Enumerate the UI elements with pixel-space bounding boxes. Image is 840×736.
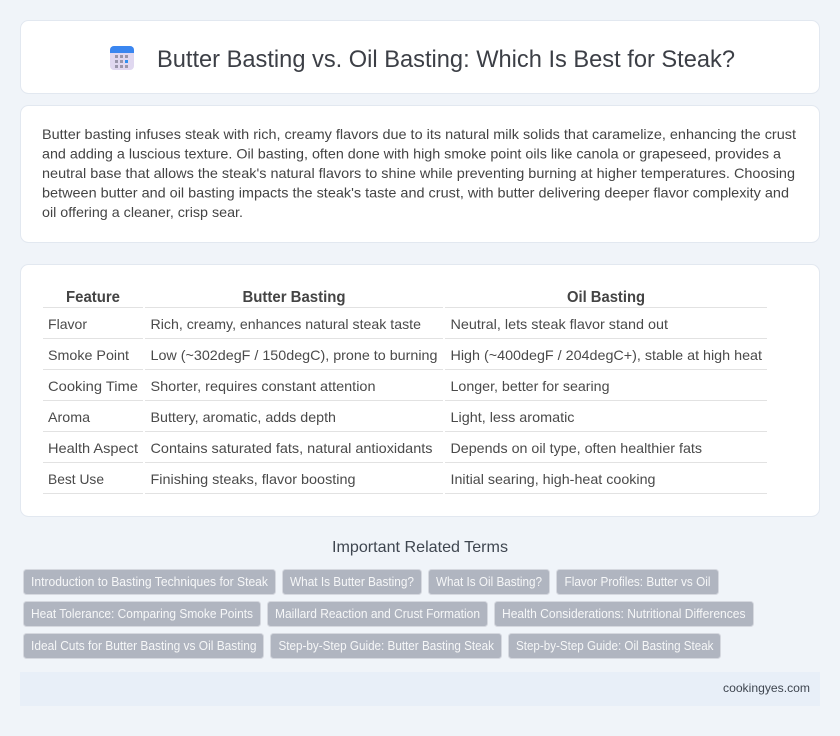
panel: header xyxy=(20,20,820,94)
text block: introduction: and adding a luscious texture. Oil basting, often done with high smoke point oils like canola or grapeseed, provides a xyxy=(42,146,781,162)
table row: smoke point xyxy=(43,347,767,370)
panel: introduction xyxy=(20,106,820,242)
tag: heat tolerance: Heat Tolerance: Comparing Smoke Points xyxy=(31,606,253,621)
tag: introduction: Introduction to Basting Techniques for Steak xyxy=(31,574,268,589)
footer: cookingyes.com xyxy=(723,681,810,695)
tag: flavor profiles: Flavor Profiles: Butter vs Oil xyxy=(564,574,711,589)
table row: smoke point: Low (~302degF / 150degC), prone to burning xyxy=(150,347,438,363)
table header row: Oil Basting xyxy=(567,289,645,306)
text block: introduction: Butter basting infuses steak with rich, creamy flavors due to its natural milk solids that caramelize, enhancing the crust xyxy=(42,126,796,142)
heading: important related terms: Important Related Terms xyxy=(332,539,508,556)
table row: flavor: Flavor xyxy=(48,316,87,332)
tag: ideal cuts: Ideal Cuts for Butter Basting vs Oil Basting xyxy=(31,638,256,653)
table row: best use xyxy=(43,471,767,494)
tag: introduction xyxy=(24,570,276,594)
table header row: Feature xyxy=(66,289,120,306)
table row: cooking time: Longer, better for searing xyxy=(450,378,610,394)
table row: aroma xyxy=(43,409,767,432)
related term tags xyxy=(24,570,754,658)
tag: maillard reaction xyxy=(268,602,488,626)
tag: butter guide: Step-by-Step Guide: Butter Basting Steak xyxy=(278,638,494,653)
tag: ideal cuts xyxy=(24,634,264,658)
tag: what is oil basting xyxy=(428,570,550,594)
tag: oil guide xyxy=(508,634,720,658)
table row: health aspect: Depends on oil type, often healthier fats xyxy=(450,440,702,456)
table row: smoke point: Smoke Point xyxy=(48,347,129,363)
table row: smoke point: High (~400degF / 204degC+), stable at high heat xyxy=(450,347,762,363)
table row: best use: Best Use xyxy=(48,471,104,487)
table row: cooking time: Shorter, requires constant attention xyxy=(150,378,376,394)
table row: aroma: Buttery, aromatic, adds depth xyxy=(150,409,336,425)
tag: maillard reaction: Maillard Reaction and Crust Formation xyxy=(275,606,480,621)
tag: heat tolerance xyxy=(24,602,260,626)
table row: health aspect xyxy=(43,440,767,463)
tag: what is butter basting: What Is Butter Basting? xyxy=(290,574,414,589)
table row: health aspect: Contains saturated fats, natural antioxidants xyxy=(150,440,432,456)
title: Butter Basting vs. Oil Basting: Which Is Best for Steak? xyxy=(157,46,735,73)
text block: introduction xyxy=(42,126,796,220)
tag: health considerations: Health Considerations: Nutritional Differences xyxy=(502,606,746,621)
tag: butter guide xyxy=(270,634,502,658)
table row: flavor: Rich, creamy, enhances natural steak taste xyxy=(150,316,421,332)
table row: flavor xyxy=(43,316,767,339)
table row: aroma: Light, less aromatic xyxy=(450,409,574,425)
table header row: Butter Basting xyxy=(242,289,346,306)
table row: best use: Initial searing, high-heat cooking xyxy=(450,471,656,487)
text block: introduction: oil offering a cleaner, crisp sear. xyxy=(42,204,243,220)
tag: what is oil basting: What Is Oil Basting? xyxy=(436,574,542,589)
tag: flavor profiles xyxy=(556,570,718,594)
text block: introduction: between butter and oil basting impacts the steak's taste and crust, with butter delivering deeper flavor complexity and xyxy=(42,184,789,200)
table row: cooking time: Cooking Time xyxy=(48,378,138,394)
icon: calendar xyxy=(110,46,134,70)
tag: health considerations xyxy=(494,602,754,626)
table header row xyxy=(43,289,767,308)
table row: best use: Finishing steaks, flavor boosting xyxy=(150,471,356,487)
text block: introduction: neutral base that allows the steak's natural flavors to shine while preventing burning at higher temperatures. Choosing xyxy=(42,165,795,181)
table row: aroma: Aroma xyxy=(48,409,90,425)
table row: cooking time xyxy=(43,378,767,401)
table row: health aspect: Health Aspect xyxy=(48,440,138,456)
tag: oil guide: Step-by-Step Guide: Oil Basting Steak xyxy=(516,638,714,653)
footer xyxy=(20,672,820,706)
panel: comparison table xyxy=(20,264,820,516)
table row: flavor: Neutral, lets steak flavor stand out xyxy=(450,316,668,332)
tag: what is butter basting xyxy=(282,570,422,594)
